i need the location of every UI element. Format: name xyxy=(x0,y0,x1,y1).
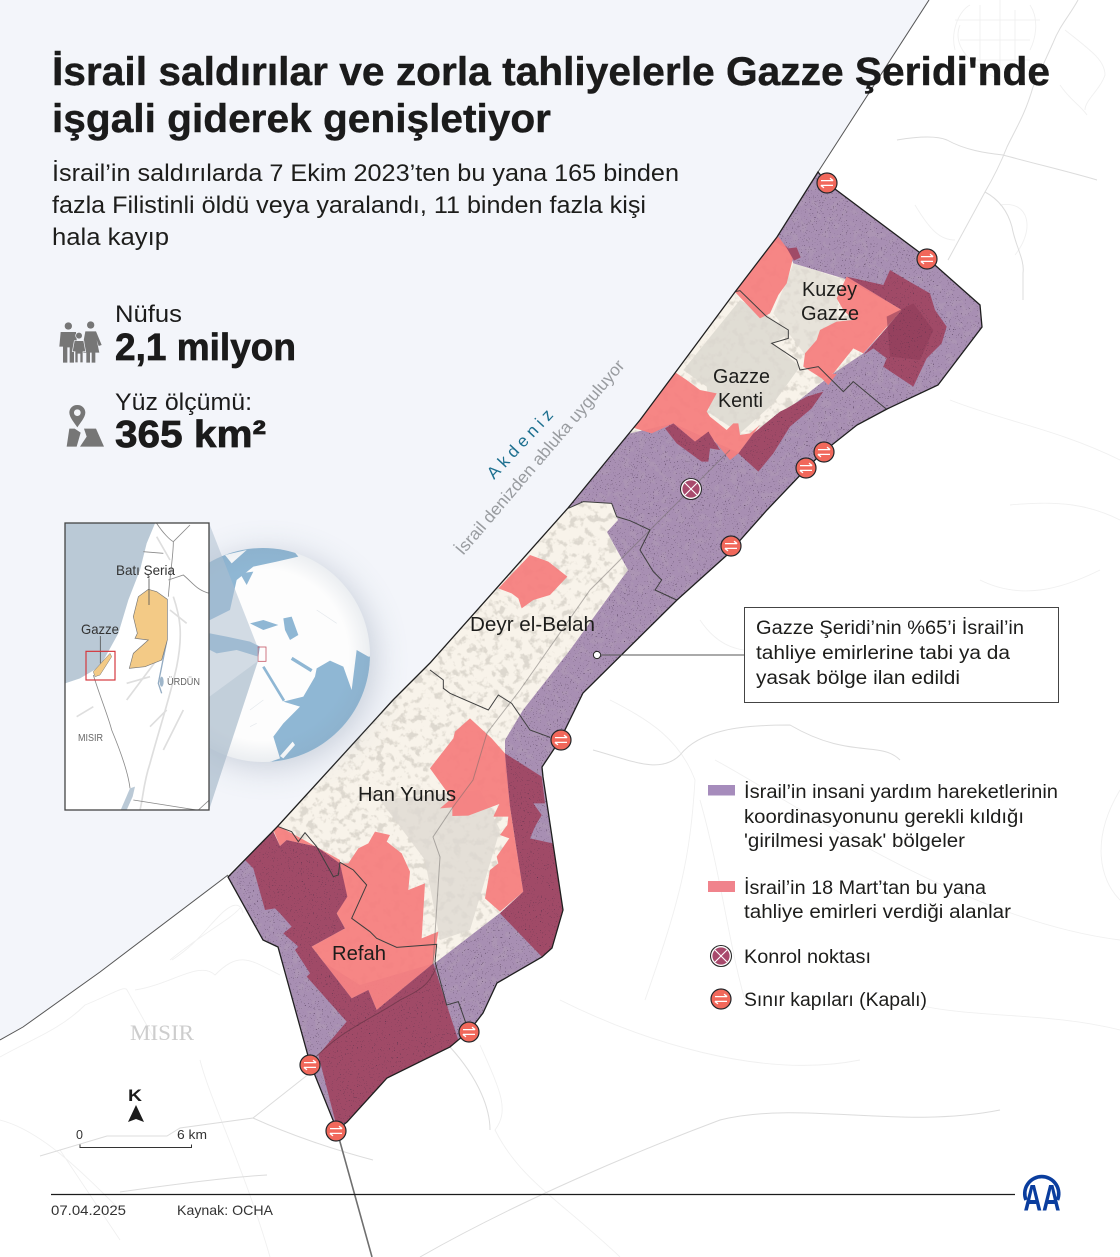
label: Misir: MISIR xyxy=(130,1020,194,1045)
zone: no-go purple base xyxy=(228,172,982,1130)
legend: no-go swatch xyxy=(708,785,735,796)
crossing south west xyxy=(300,1055,320,1075)
label: Deyr el-Belah: Deyr el-Belah xyxy=(470,614,595,636)
stat: area xyxy=(115,389,266,456)
title: İsrail saldırılar ve zorla tahliyelerle Gazze Şeridi'nde xyxy=(52,50,1050,94)
footer date: 07.04.2025 xyxy=(51,1202,126,1218)
title: işgali giderek genişletiyor xyxy=(52,97,551,141)
scale bar: 6 km xyxy=(177,1128,207,1142)
label: Akdeniz sea: Akdeniz xyxy=(483,405,557,483)
legend: no-go text: İsrail’in insani yardım hareketlerinin xyxy=(744,782,1058,803)
inset labels: ÜRDÜN xyxy=(167,676,200,688)
footer source: Kaynak: OCHA xyxy=(177,1202,274,1218)
legend: checkpoint text: Konrol noktası xyxy=(744,947,871,968)
inset Gaza xyxy=(93,653,112,677)
title xyxy=(52,50,1050,141)
south road xyxy=(310,965,437,1063)
governorate borders xyxy=(278,291,887,1030)
subtitle: hala kayıp xyxy=(52,224,169,251)
AA logo xyxy=(1024,1177,1060,1218)
globe xyxy=(210,540,388,780)
callout xyxy=(593,608,1058,702)
legend: crossing text: Sınır kapıları (Kapalı) xyxy=(744,990,927,1011)
legend: evacuation text: İsrail’in 18 Mart’tan bu yana xyxy=(744,878,986,899)
subtitle: İsrail’in saldırılarda 7 Ekim 2023’ten bu yana 165 binden xyxy=(52,160,679,187)
border crossing icons xyxy=(300,173,937,1141)
legend: evacuation text: tahliye emirleri verdiği alanlar xyxy=(744,902,1012,923)
zone: remaining cream land xyxy=(262,242,903,985)
label: Han Yunus: Han Yunus xyxy=(358,784,456,806)
inset red box xyxy=(86,651,115,680)
footer rule xyxy=(51,1194,1015,1196)
label: Gazze Kenti: Gazze xyxy=(713,366,770,388)
crossing northeast xyxy=(917,249,937,269)
crossing north xyxy=(817,173,837,193)
coastline xyxy=(0,0,929,1040)
zone: overlap of no-go and evacuation xyxy=(245,238,947,1127)
scale bar xyxy=(76,1128,207,1148)
inset labels: Gazze xyxy=(81,621,119,637)
label: Refah: Refah xyxy=(332,943,386,965)
checkpoint icon xyxy=(680,478,702,500)
label: naval blockade: İsrail denizden abluka uyguluyor xyxy=(452,356,629,559)
legend: no-go text: 'girilmesi yasak' bölgeler xyxy=(744,831,966,852)
scale bar: 0 xyxy=(76,1128,83,1142)
strip outline xyxy=(228,172,982,1130)
AA logo: AA xyxy=(1024,1178,1060,1218)
crossing mid xyxy=(551,730,571,750)
crossing east 2 xyxy=(796,458,816,478)
inset sea xyxy=(65,523,155,683)
legend: evacuation swatch xyxy=(708,881,735,892)
sea xyxy=(0,0,930,1040)
crossing south east xyxy=(459,1022,479,1042)
inset connector wedge xyxy=(209,523,258,810)
label: Kuzey Gazze xyxy=(801,279,859,325)
icon: family xyxy=(59,321,102,363)
crossing south xyxy=(326,1121,346,1141)
legend: checkpoint icon xyxy=(710,946,732,966)
legend: evacuation text xyxy=(744,878,1012,923)
inset borders xyxy=(93,523,209,810)
main road xyxy=(433,450,730,965)
label: Gazze Kenti xyxy=(713,366,770,412)
inset labels: MISIR xyxy=(78,733,103,744)
label: Kuzey Gazze: Gazze xyxy=(801,303,859,325)
legend: no-go text: koordinasyonunu gerekli kıldığı xyxy=(744,807,1024,828)
globe water xyxy=(210,548,370,762)
inset leader lines xyxy=(100,578,149,663)
inset terrain xyxy=(77,537,187,810)
callout: tahliye emirlerine tabi ya da xyxy=(756,643,1010,664)
stat: area: Yüz ölçümü: xyxy=(115,389,252,416)
north arrow: K xyxy=(128,1086,143,1105)
legend: no-go text xyxy=(744,782,1058,852)
panel: map of Gaza Strip xyxy=(220,170,990,1257)
stat: area: 365 km² xyxy=(115,414,266,456)
globe shadow xyxy=(161,553,375,767)
inset labels: Batı Şeria xyxy=(116,562,175,578)
subtitle xyxy=(52,160,679,251)
callout: yasak bölge ilan edildi xyxy=(756,668,960,689)
road south of Rafah xyxy=(337,1131,372,1257)
callout: Gazze Şeridi’nin %65’i İsrail’in xyxy=(756,618,1024,639)
crossing east 3 xyxy=(721,536,741,556)
label: Kuzey Gazze: Kuzey xyxy=(802,279,857,301)
inset West Bank xyxy=(129,589,167,668)
icon: map pin xyxy=(67,405,104,447)
crossing east 1 xyxy=(814,442,834,462)
legend xyxy=(708,782,1058,1011)
zone: evacuation order areas xyxy=(273,230,902,1010)
inset locator map xyxy=(65,523,209,810)
stat: population: 2,1 milyon xyxy=(115,327,296,369)
legend: crossing icon xyxy=(711,989,731,1009)
subtitle: fazla Filistinli öldü veya yaralandı, 11 binden fazla kişi xyxy=(52,192,646,219)
stat: population: Nüfus xyxy=(115,301,182,328)
north arrow xyxy=(128,1086,144,1122)
urban texture xyxy=(280,264,888,964)
label: Gazze Kenti: Kenti xyxy=(718,390,763,412)
stat: population xyxy=(115,301,296,369)
inset labels xyxy=(78,562,200,744)
